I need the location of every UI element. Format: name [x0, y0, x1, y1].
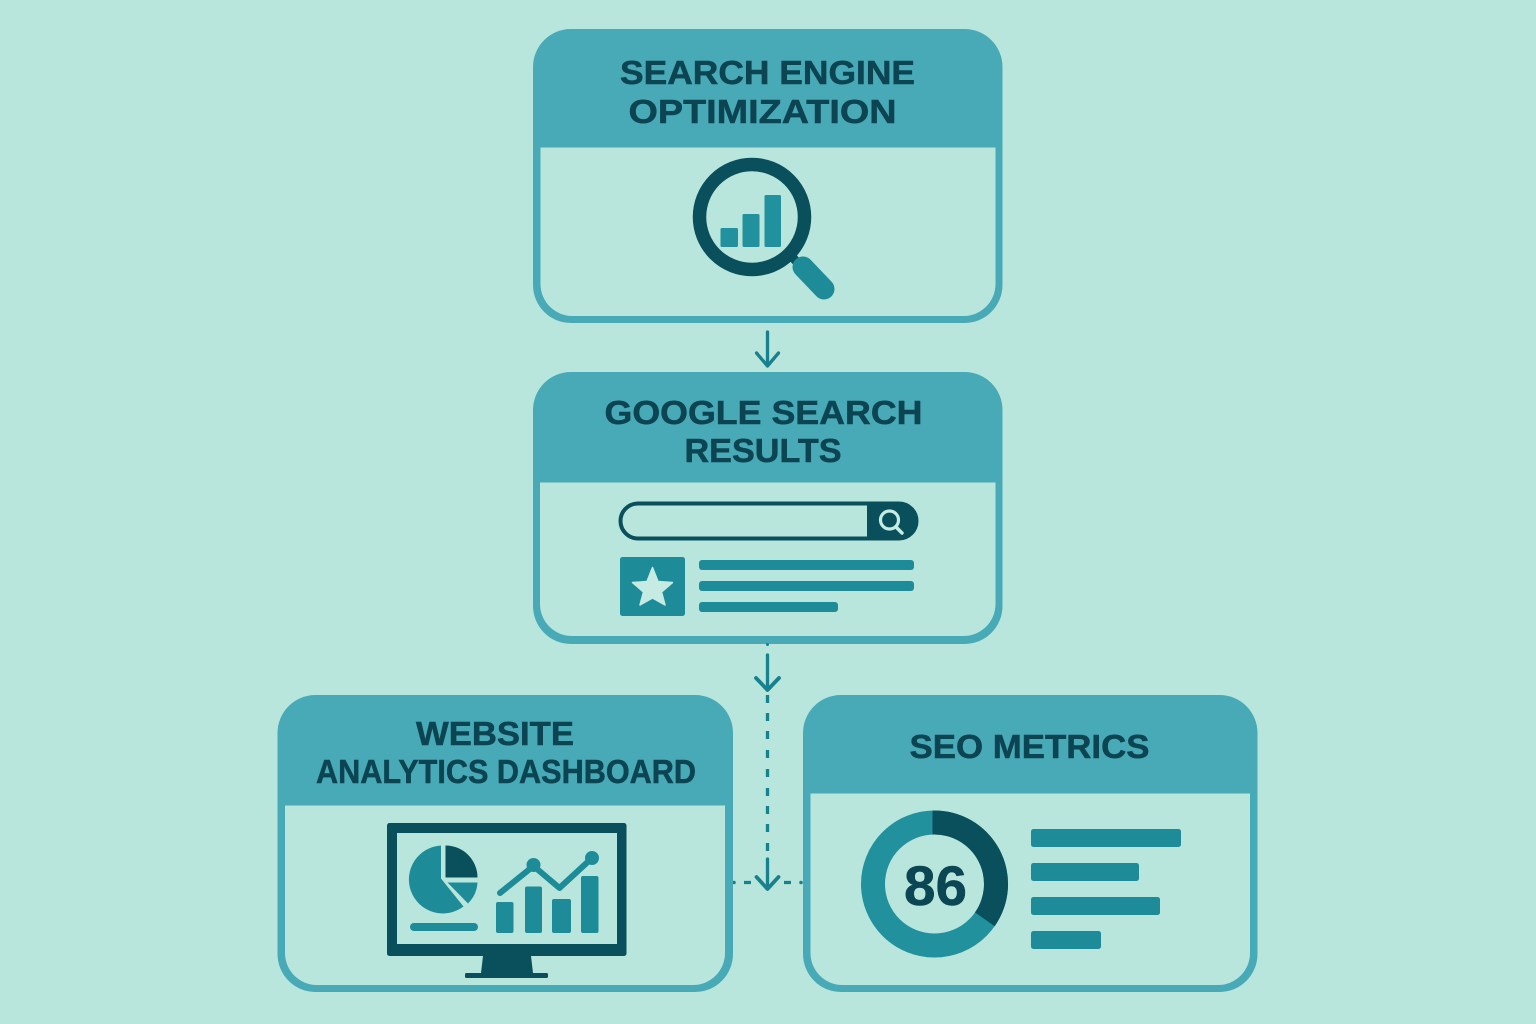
heading: SEARCH ENGINE	[620, 54, 915, 91]
panel frame	[278, 695, 733, 992]
heading line 2: OPTIMIZATION	[628, 93, 896, 130]
metric bars	[1031, 829, 1181, 949]
score: 86	[904, 854, 967, 917]
dashed connector	[732, 695, 803, 884]
arrow: into metrics row	[756, 859, 778, 889]
arrow: google results to dashboards	[756, 643, 779, 690]
icon: search magnifier	[880, 511, 902, 533]
donut chart	[873, 810, 1008, 946]
panel body	[285, 806, 725, 985]
search bar	[620, 502, 918, 540]
panel frame	[533, 29, 1002, 323]
arrow: seo to google results	[756, 332, 778, 366]
panel frame	[533, 372, 1002, 644]
line chart	[500, 851, 599, 893]
icon: monitor	[387, 823, 626, 978]
heading: GOOGLE SEARCH	[604, 394, 922, 431]
panel body	[540, 148, 996, 316]
panel: search engine optimization	[533, 29, 1002, 323]
pie chart	[409, 846, 478, 913]
heading: SEO METRICS	[910, 728, 1150, 765]
panel body	[810, 794, 1250, 985]
panel frame	[803, 695, 1258, 992]
icon: magnifying glass with bars	[700, 164, 824, 289]
heading line 2: RESULTS	[684, 432, 842, 469]
result tile with star	[620, 557, 685, 616]
panel: seo metrics	[803, 695, 1258, 992]
result lines	[699, 560, 914, 612]
bar chart	[496, 876, 598, 933]
heading: WEBSITE	[416, 715, 574, 752]
heading line 2: ANALYTICS DASHBOARD	[316, 753, 696, 790]
panel: google search results	[533, 372, 1002, 644]
panel body	[540, 482, 996, 636]
legend bar	[410, 923, 478, 931]
panel: website analytics dashboard	[278, 695, 733, 992]
